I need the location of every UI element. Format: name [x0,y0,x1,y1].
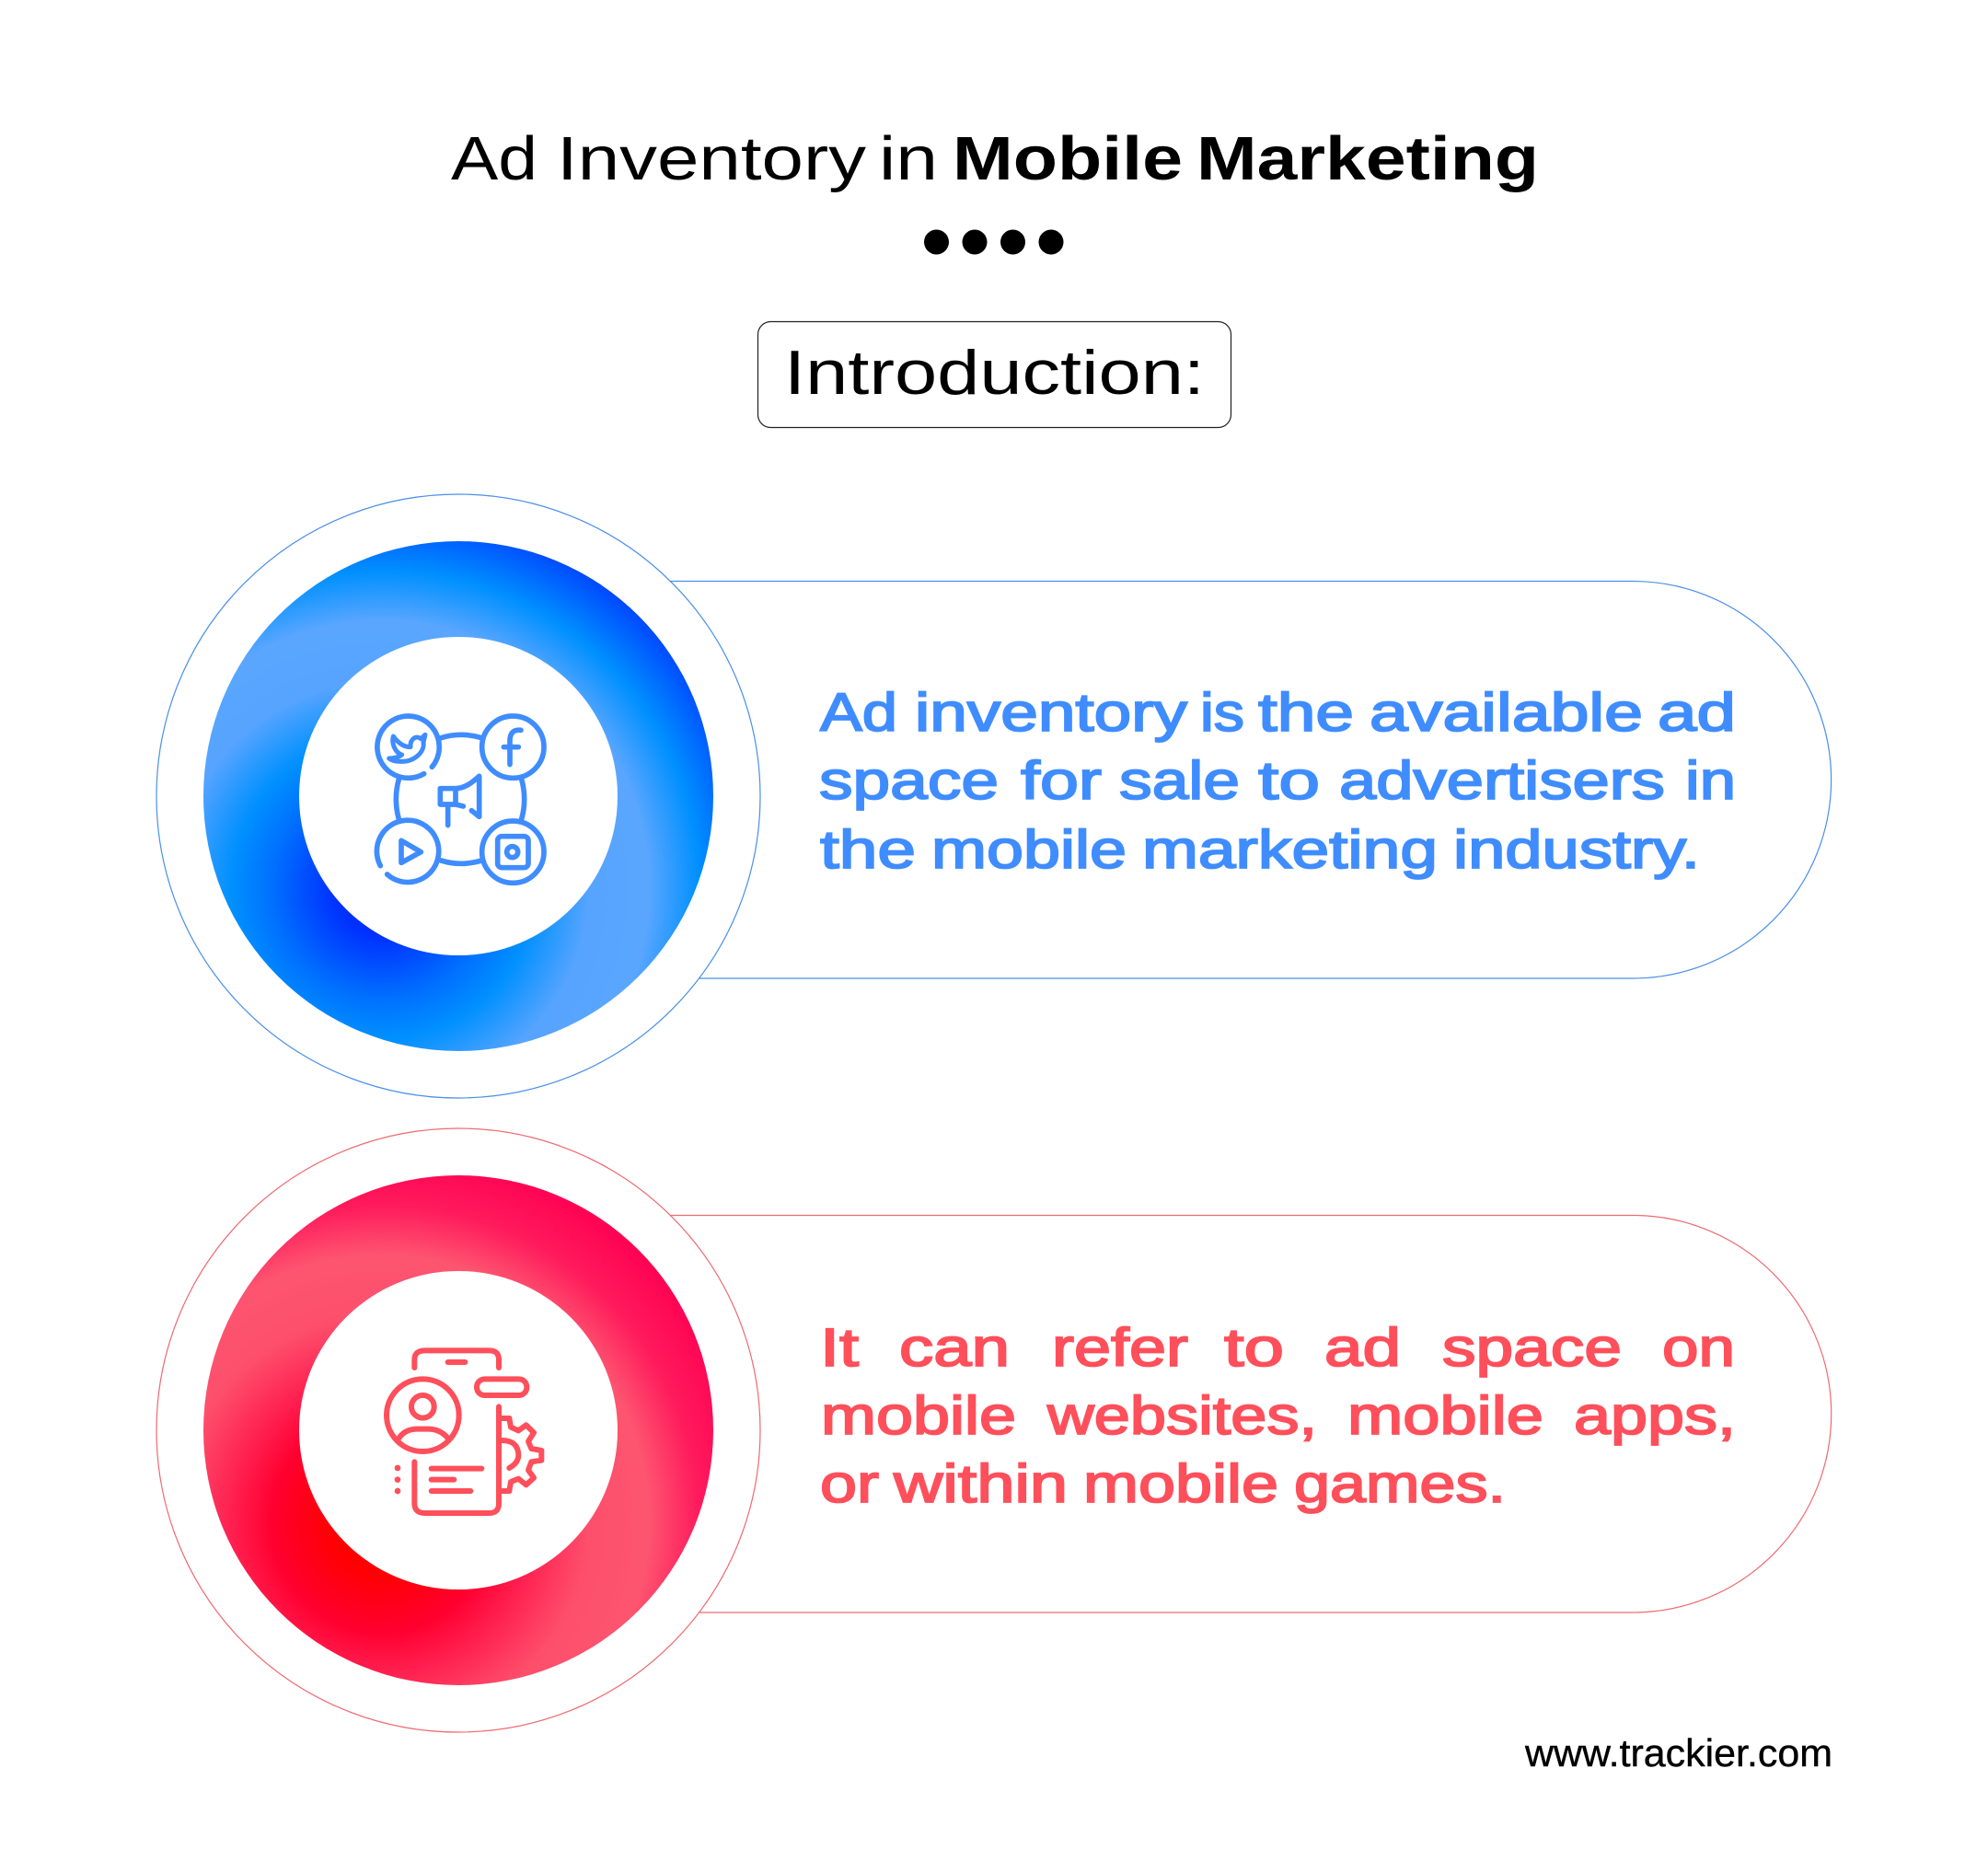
text: definition [819,683,1736,880]
text: definition: available [1370,683,1643,743]
text: definition: sale [1119,751,1240,811]
panel: where ad space appears [156,1128,1832,1732]
text: ad space locations: can [899,1318,1010,1378]
icon: social media megaphone [376,716,544,883]
introduction box [758,322,1231,427]
text: definition: is [1200,683,1244,743]
footer url: www.trackier.com [1524,1731,1832,1774]
gradient donut [203,541,713,1051]
text: ad space locations: It [820,1318,859,1378]
text: ad space locations: apps, [1574,1386,1736,1446]
text: ad space locations: within [893,1454,1068,1514]
title: in [879,124,938,193]
gradient donut [203,1175,713,1685]
introduction box: Introduction: [784,338,1205,408]
text: ad space locations: mobile [1347,1386,1543,1446]
text: definition: marketing [1142,820,1438,880]
text: ad space locations: or [820,1454,879,1514]
text: definition: inventory [915,683,1187,743]
text: definition: for [1021,751,1102,811]
text: ad space locations: websites, [1046,1386,1317,1446]
title: Ad [451,124,537,193]
title [451,124,1539,193]
title dots [924,230,1064,254]
text: definition: the [1258,683,1354,743]
text: definition: the [820,820,916,880]
text: ad space locations [820,1318,1736,1514]
text: ad space locations: space [1442,1318,1622,1378]
text: ad space locations: ad [1324,1318,1401,1378]
outer ring [156,1128,760,1732]
text: ad space locations: on [1662,1318,1735,1378]
text: definition: mobile [931,820,1127,880]
panel: ad inventory definition [156,494,1832,1098]
text pill outline [670,1215,1832,1612]
text: definition: to [1258,751,1320,811]
text: ad space locations: refer [1052,1318,1188,1378]
title: Inventory [557,124,867,193]
text: definition: in [1685,751,1736,811]
text: ad space locations: mobile [1083,1454,1278,1514]
text: definition: advertisers [1339,751,1665,811]
text: ad space locations: to [1224,1318,1284,1378]
text: definition: ad [1658,683,1736,743]
outer ring [156,494,760,1098]
title: Mobile [953,124,1183,193]
text: definition: Ad [820,683,897,743]
icon: mobile phone profile [387,1350,541,1513]
text: ad space locations: mobile [821,1386,1016,1446]
text: definition: space [819,751,999,811]
title: Marketing [1196,124,1539,193]
text: ad space locations: games. [1294,1454,1506,1514]
text pill outline [670,582,1832,978]
text: definition: industry. [1453,820,1700,880]
